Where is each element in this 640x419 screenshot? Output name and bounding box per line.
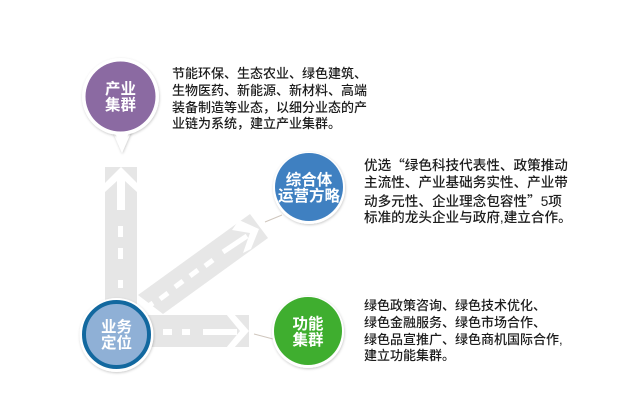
text block: integrated operators: 动多元性、企业理念包容性”5项	[364, 190, 562, 210]
connector lines	[254, 215, 282, 339]
arrow: horizontal road to function cluster	[140, 314, 249, 348]
icon: blue ringed circle business positioning: 业务	[101, 317, 132, 336]
icon: blue circle integrated operators	[273, 152, 345, 224]
text block: function cluster: 建立功能集群。	[364, 348, 455, 363]
icon: blue ringed circle business positioning	[80, 298, 154, 372]
text block: industry cluster: 业链为系统，建立产业集群。	[172, 116, 341, 131]
icon: blue ringed circle business positioning: 定位	[101, 333, 132, 352]
text block: function cluster	[364, 298, 563, 363]
icon: green circle function cluster: 功能	[292, 314, 324, 333]
icon: purple pin with industry cluster: 产业	[105, 80, 136, 98]
text block: integrated operators: 主流性、产业基础务实性、产业带	[364, 175, 568, 190]
text block: industry cluster: 节能环保、生态农业、绿色建筑、	[172, 66, 367, 81]
icon: blue circle integrated operators: 综合体	[286, 170, 333, 189]
text block: function cluster: 绿色政策咨询、绿色技术优化、	[364, 298, 546, 313]
icon: green circle function cluster: 集群	[292, 330, 324, 349]
icon: blue circle integrated operators: 运营方略	[278, 186, 340, 205]
text block: integrated operators	[364, 154, 572, 225]
text block: industry cluster: 生物医药、新能源、新材料、高端	[172, 83, 367, 98]
icon: green circle function cluster	[272, 296, 344, 368]
arrow: vertical road to industry cluster	[105, 167, 137, 310]
text block: function cluster: 绿色品宣推广、绿色商机国际合作,	[364, 332, 563, 347]
icon: purple pin with industry cluster: 集群	[105, 95, 136, 114]
text block: function cluster: 绿色金融服务、绿色市场合作、	[364, 315, 546, 330]
icon: purple pin with industry cluster	[82, 58, 159, 153]
arrow: diagonal road to integrated operators	[138, 214, 268, 314]
text block: industry cluster: 装备制造等业态，以细分业态的产	[172, 100, 367, 115]
text block: integrated operators: 标准的龙头企业与政府,建立合作。	[364, 210, 572, 225]
text block: integrated operators: 优选“绿色科技代表性、政策推动	[364, 154, 568, 174]
text block: industry cluster	[172, 66, 367, 131]
